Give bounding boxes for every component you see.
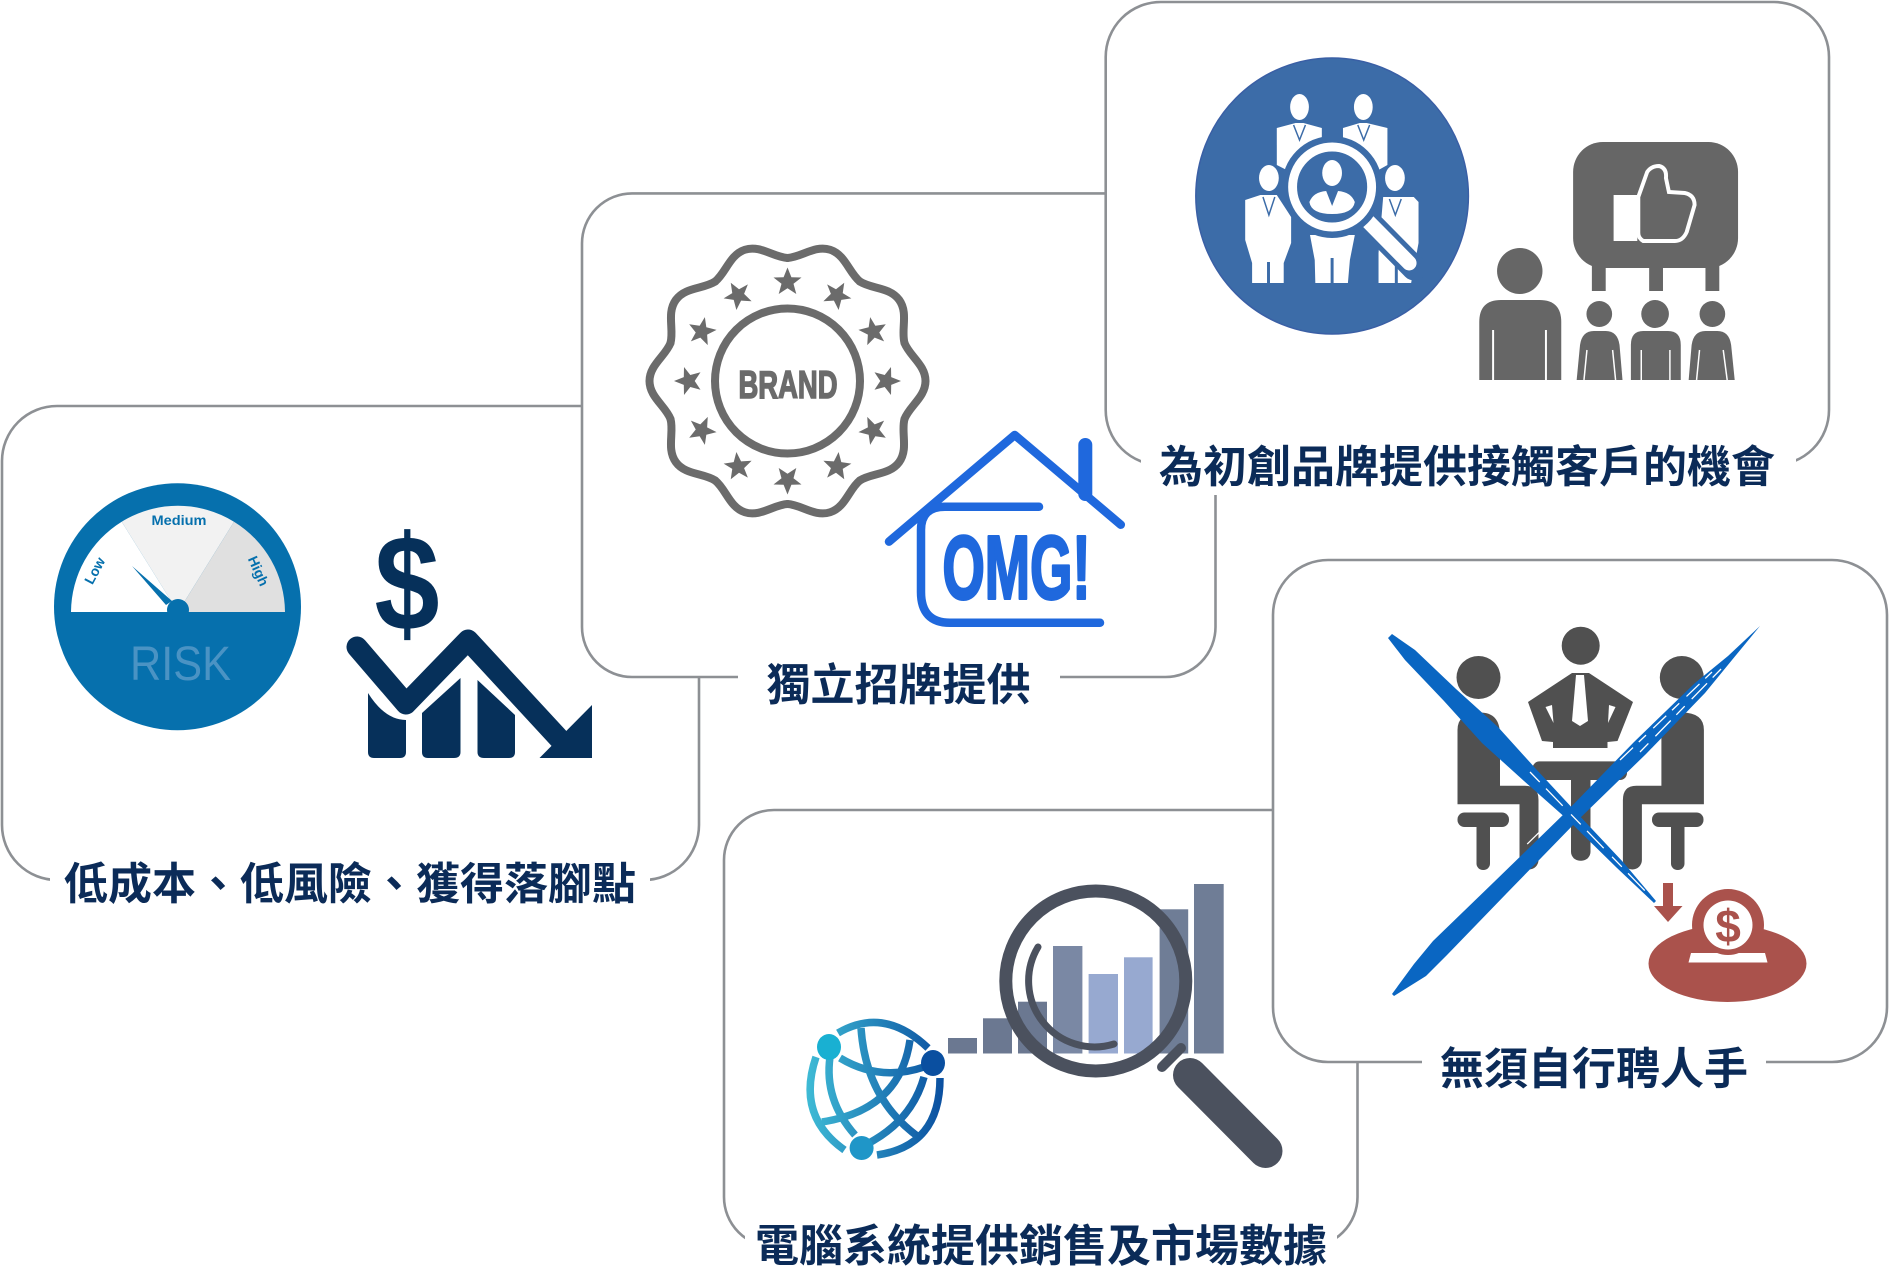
icon: network globe [810,1022,945,1160]
icon: brand badge: BRAND [738,364,838,407]
icon: falling dollar chart: $ [374,507,440,659]
icon: blue cross out [1388,626,1760,996]
icon: meeting people [1456,627,1704,870]
icon: talent search circle [1196,58,1468,334]
label: low cost: 低成本、低風險、獲得落腳點 [64,860,636,909]
panel: no hiring [1273,560,1887,1094]
panel: low cost low risk [2,406,699,910]
panel: independent brand [582,193,1216,710]
icon: money savings [1648,883,1806,1002]
panel: computer data [724,810,1358,1270]
icon: money savings: $ [1715,900,1741,952]
icon: risk gauge: RISK [130,638,231,691]
icon: OMG house: OMG! [942,518,1090,618]
icon: magnifying glass [1006,891,1266,1151]
icon: bar chart under magnifier [948,884,1224,1054]
icon: brand badge [650,238,926,524]
icon: risk gauge: High [245,554,272,588]
icon: OMG house [889,435,1121,623]
icon: risk gauge: Low [81,554,108,587]
label: computer data: 電腦系統提供銷售及市場數據 [755,1222,1327,1270]
icon: risk gauge [54,483,301,730]
label: no hiring: 無須自行聘人手 [1440,1045,1748,1094]
icon: falling dollar chart [357,507,592,758]
icon: risk gauge: Medium [152,512,206,528]
icon: thumbs up board with audience [1479,142,1738,380]
label: customer access: 為初創品牌提供接觸客戶的機會 [1159,443,1775,492]
panel: customer access [1106,2,1829,495]
label: independent brand: 獨立招牌提供 [766,661,1030,710]
